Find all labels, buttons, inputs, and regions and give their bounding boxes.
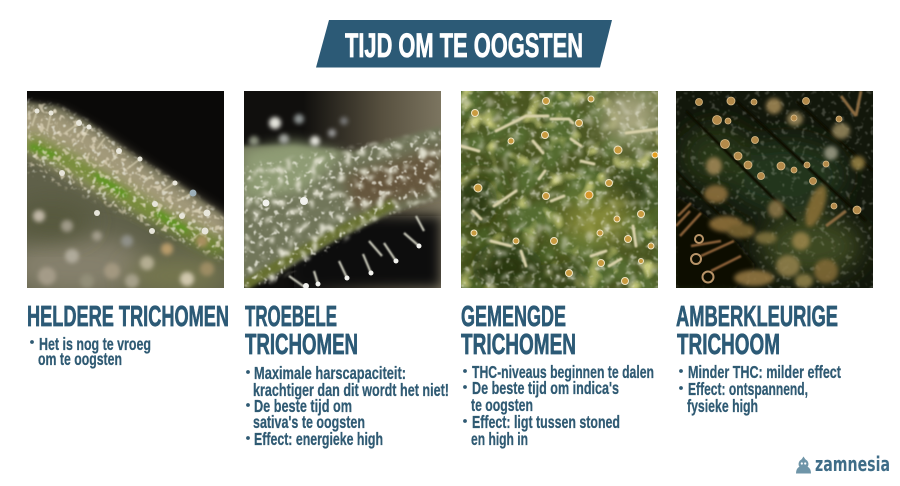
bullet list: te oogsten [471,395,533,415]
bullet list [463,362,654,449]
heading [245,301,358,361]
heading: TRICHOMEN [245,329,358,361]
photo: clear trichomes [27,91,224,288]
bullet list: om te oogsten [38,349,122,369]
heading: TRICHOMEN [461,329,576,361]
bullet list: Effect: ontspannend, [688,379,808,399]
zamnesia logo [796,452,890,476]
photo: cloudy trichomes [244,91,441,288]
heading [461,301,576,361]
heading: HELDERE TRICHOMEN [27,301,229,333]
column 3: mixed trichomes [461,301,654,449]
heading: GEMENGDE [461,301,566,333]
bullet list: en high in [471,429,528,449]
bullet list: fysieke high [687,396,758,416]
column 1: clear trichomes [27,301,229,369]
bullet list: Effect: energieke high [254,429,383,449]
bullet list: THC-niveaus beginnen te dalen [472,362,654,382]
heading [676,301,838,361]
column 2: cloudy trichomes [245,301,449,449]
title banner: TIJD OM TE OOGSTEN [345,27,583,65]
bullet list: Maximale harscapaciteit: [254,363,406,383]
bullet list: sativa's te oogsten [253,412,365,432]
bullet list: krachtiger dan dit wordt het niet! [253,380,449,400]
column 4: amber trichomes [676,301,841,416]
bullet list [30,334,151,369]
bullet list: Effect: ligt tussen stoned [472,412,620,432]
icon: mascot [796,456,811,474]
bullet list: Minder THC: milder effect [688,362,841,382]
bullet list [246,363,449,449]
photo: mixed trichomes [461,91,658,288]
bullet list [679,362,841,416]
heading: TROEBELE [245,301,337,333]
bullet list: Het is nog te vroeg [39,334,151,354]
heading: TRICHOOM [677,329,780,361]
title banner [316,20,612,68]
bullet list: De beste tijd om [254,396,352,416]
photo: amber trichomes [676,91,873,288]
bullet list: De beste tijd om indica's [472,378,619,398]
